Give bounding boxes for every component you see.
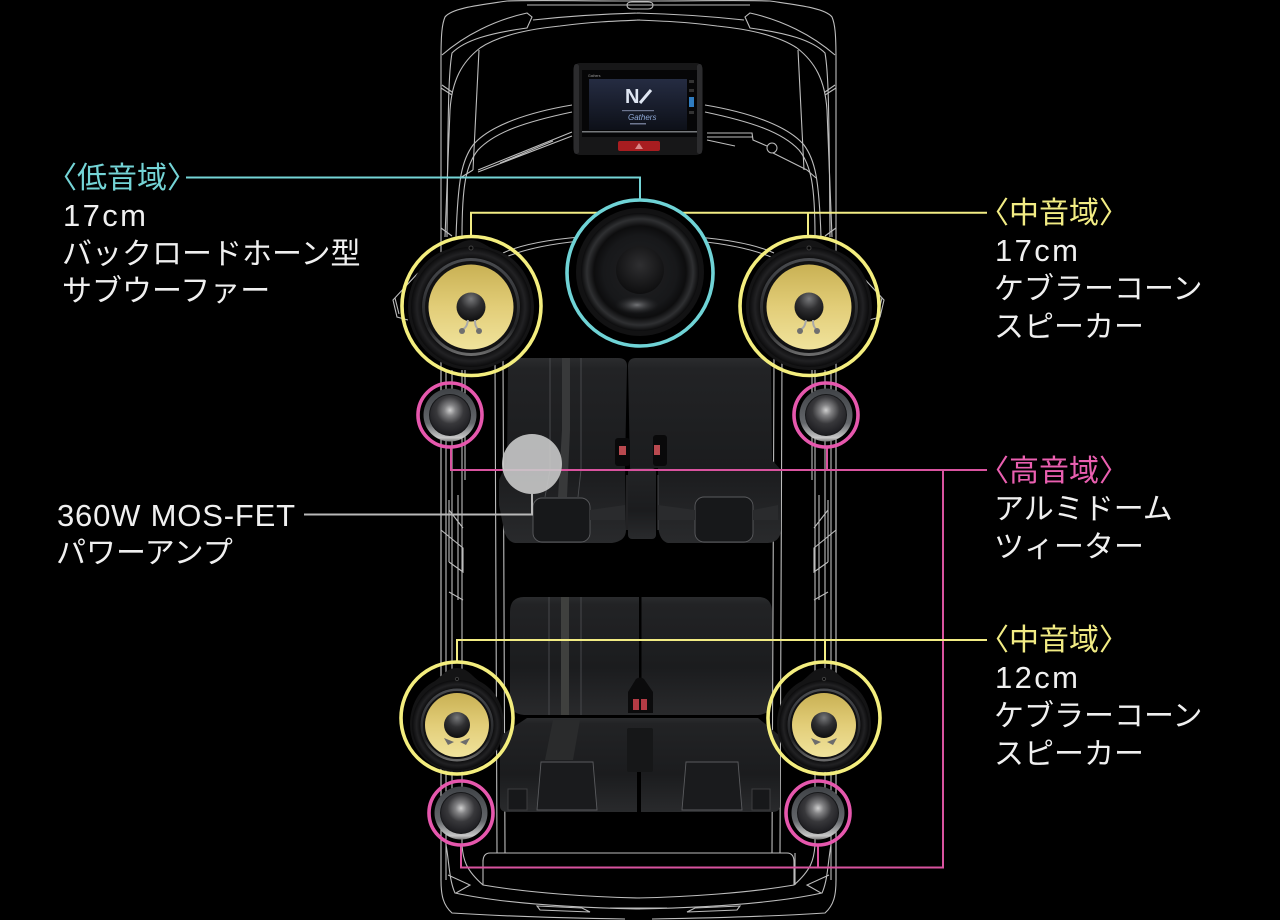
label: front midrange: スピーカー xyxy=(994,311,1144,344)
speaker: rear right tweeter xyxy=(786,781,850,845)
rear seats xyxy=(500,597,780,812)
leader line: bass xyxy=(186,178,640,200)
label: amplifier xyxy=(56,498,295,570)
leader line: front midrange xyxy=(471,213,987,236)
speaker: front right tweeter xyxy=(794,383,858,447)
label: front midrange xyxy=(979,197,1202,344)
car body outline xyxy=(393,1,884,919)
right wiper pivot xyxy=(767,143,777,153)
label: rear midrange xyxy=(979,624,1202,771)
navigation head unit: Gathers xyxy=(588,74,601,78)
speaker: rear right midrange xyxy=(768,662,880,774)
leader line: rear midrange xyxy=(457,640,987,661)
amplifier marker xyxy=(304,434,562,514)
hazard button xyxy=(618,141,660,151)
label: rear midrange: スピーカー xyxy=(994,738,1144,771)
speaker: rear left tweeter xyxy=(429,781,493,845)
left wiper xyxy=(460,132,572,178)
label: bass: バックロードホーン型 xyxy=(62,238,360,271)
label: bass xyxy=(47,162,360,308)
nav screen xyxy=(589,79,687,130)
speaker: front left midrange xyxy=(402,236,541,376)
label: tweeter xyxy=(979,455,1173,564)
speaker: front left tweeter xyxy=(418,383,482,447)
right wiper arm xyxy=(707,133,816,178)
label: front midrange: 17cm xyxy=(995,233,1078,268)
label: rear midrange: 12cm xyxy=(995,660,1078,695)
leader line: tweeters xyxy=(451,448,987,868)
speaker: front right midrange xyxy=(740,236,879,376)
front seats xyxy=(499,358,781,543)
navigation head unit xyxy=(573,63,703,155)
nav screen: Gathers xyxy=(628,113,656,122)
speaker: rear left midrange xyxy=(401,662,513,774)
label: tweeter: 〈高音域〉 xyxy=(979,455,1129,488)
label: rear midrange: 〈中音域〉 xyxy=(979,624,1129,657)
label: bass: 〈低音域〉 xyxy=(47,162,197,195)
label: front midrange: ケブラーコーン xyxy=(994,273,1202,306)
label: amplifier: 360W MOS-FET xyxy=(57,498,295,533)
label: bass: 17cm xyxy=(63,198,146,233)
label: tweeter: ツィーター xyxy=(994,531,1144,564)
label: front midrange: 〈中音域〉 xyxy=(979,197,1129,230)
nav screen: N xyxy=(625,86,639,108)
label: amplifier: パワーアンプ xyxy=(56,537,233,570)
label: tweeter: アルミドーム xyxy=(994,493,1173,526)
label: rear midrange: ケブラーコーン xyxy=(994,700,1202,733)
label: bass: サブウーファー xyxy=(62,275,270,308)
speaker: subwoofer xyxy=(567,200,713,346)
